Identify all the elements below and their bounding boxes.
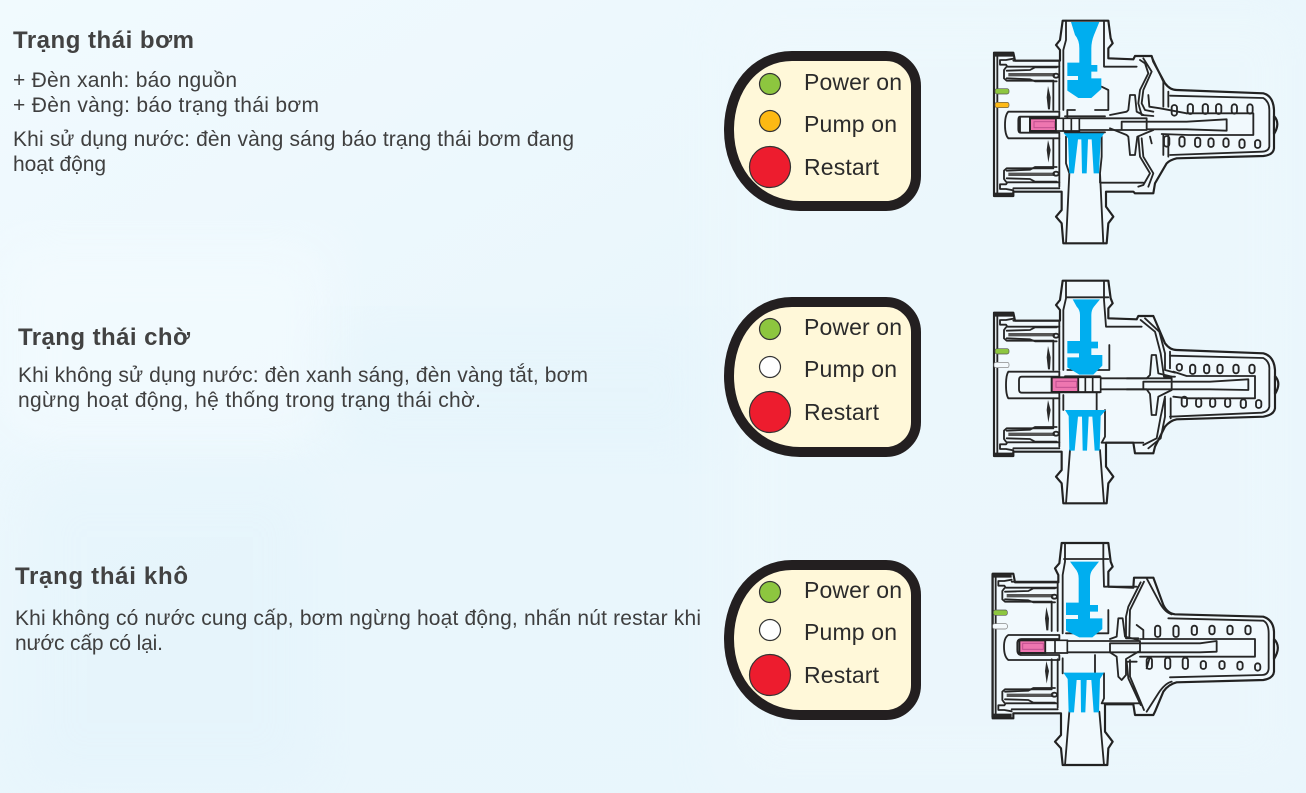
label: Power on: Power on — [804, 577, 902, 603]
indicator: off — [994, 362, 1009, 368]
heading: Trạng thái khô: Trạng thái khô — [15, 563, 188, 590]
indicator: off — [993, 624, 1007, 629]
water: lower — [1063, 133, 1105, 173]
diagram: valve dry — [992, 543, 1278, 765]
light: pump on yellow — [760, 110, 780, 132]
text: mô tả trạng thái chờ — [18, 364, 588, 412]
piston — [1030, 118, 1056, 131]
light: pump off — [760, 620, 780, 640]
text: đèn xanh: + Đèn xanh: báo nguồn — [13, 69, 237, 92]
text: mô tả trạng thái bơm — [13, 128, 574, 176]
label: Restart: Restart — [804, 399, 880, 425]
text: mô tả trạng thái chờ: ngừng hoạt động, hệ thống trong trạng thái chờ. — [18, 389, 481, 412]
indicator: green — [995, 89, 1009, 94]
indicator: green — [995, 349, 1009, 354]
text: mô tả trạng thái bơm: Khi sử dụng nước: đèn vàng sáng báo trạng thái bơm đang — [13, 128, 574, 151]
label: Power on: Power on — [804, 314, 902, 340]
water: lower — [1063, 673, 1104, 712]
light: power on green — [760, 318, 780, 340]
water: upper — [1067, 299, 1102, 375]
piston — [1019, 640, 1045, 653]
button: restart — [750, 392, 790, 432]
label: Power on: Power on — [804, 69, 902, 95]
label: Pump on: Pump on — [804, 619, 897, 645]
heading: Trạng thái bơm: Trạng thái bơm — [13, 27, 194, 54]
water: upper — [1066, 562, 1102, 637]
diagram: valve pumping — [993, 21, 1277, 243]
indicator: green — [993, 610, 1007, 615]
section: Trạng thái chờ text — [18, 324, 588, 412]
label: Pump on: Pump on — [804, 111, 897, 137]
panel: control 1 — [729, 56, 916, 206]
text: mô tả trạng thái khô: Khi không có nước cung cấp, bơm ngừng hoạt động, nhấn nút restar khi — [15, 607, 701, 630]
text: đèn vàng: + Đèn vàng: báo trạng thái bơm — [13, 94, 319, 117]
light: power on green — [760, 74, 780, 94]
text: mô tả trạng thái khô — [15, 607, 701, 655]
label: Restart: Restart — [804, 662, 880, 688]
label: Pump on: Pump on — [804, 356, 897, 382]
diagram: valve standby — [993, 281, 1278, 503]
button: restart — [750, 654, 790, 696]
label: Restart: Restart — [804, 154, 880, 180]
text: mô tả trạng thái bơm: hoạt động — [13, 153, 106, 176]
indicator: yellow — [995, 102, 1009, 108]
heading: Trạng thái chờ: Trạng thái chờ — [18, 324, 191, 351]
light: pump off — [760, 356, 780, 378]
water: upper — [1067, 22, 1101, 98]
light: power on green — [760, 582, 780, 602]
panel: control 3 — [729, 565, 916, 715]
text: mô tả trạng thái khô: nước cấp có lại. — [15, 632, 163, 655]
button: restart — [750, 146, 790, 188]
piston — [1052, 377, 1078, 392]
water: lower — [1065, 410, 1106, 451]
section: Trạng thái khô text — [15, 563, 701, 655]
section: Trạng thái bơm text — [13, 27, 574, 176]
text: mô tả trạng thái chờ: Khi không sử dụng nước: đèn xanh sáng, đèn vàng tắt, bơm — [18, 364, 588, 387]
panel: control 2 — [729, 302, 916, 452]
